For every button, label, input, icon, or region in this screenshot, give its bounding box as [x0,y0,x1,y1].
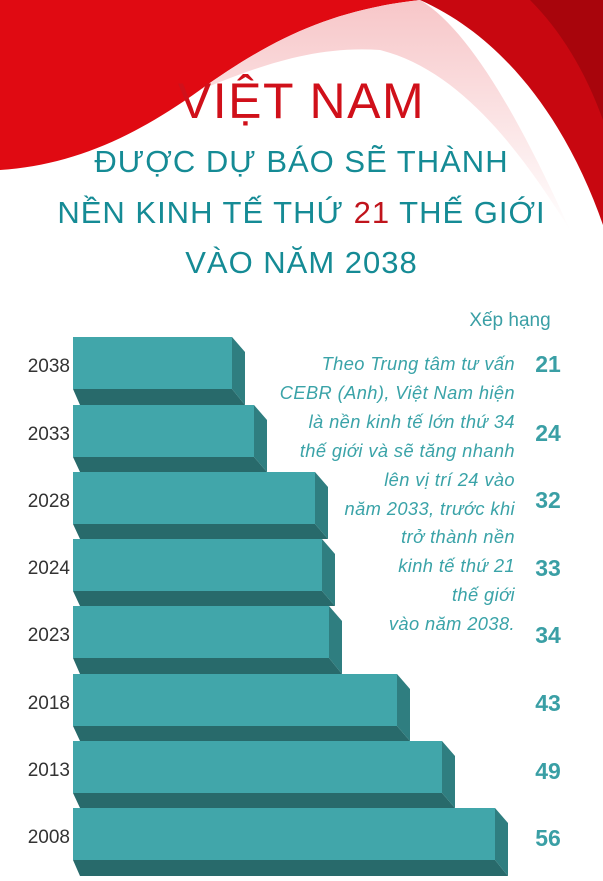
year labels: 2013 [28,760,70,781]
note text: CEBR (Anh), Việt Nam hiện [280,382,515,403]
year labels: 2033 [28,424,70,445]
subtitle: NỀN KINH TẾ THỨ 21 THẾ GIỚI [57,195,546,230]
note text: thế giới và sẽ tăng nhanh [300,440,515,461]
bar 2013 [73,741,455,808]
bar 2023 [73,606,342,674]
bar 2033 [73,405,267,472]
bar 2018 [73,674,410,741]
rank numbers: 56 [535,825,561,851]
year labels: 2008 [28,827,70,848]
subtitle [57,144,546,280]
rank header: Xếp hạng [469,310,551,331]
bar 2008 [73,808,508,876]
year labels: 2023 [28,625,70,646]
note text: thế giới [452,584,515,605]
year labels: 2028 [28,491,70,512]
rank numbers: 49 [535,758,561,784]
title: VIỆT NAM [178,73,425,129]
year labels [28,356,70,848]
note text: vào năm 2038. [389,613,515,634]
bar 2038 [73,337,245,405]
note text: năm 2033, trước khi [345,498,515,519]
rank numbers: 24 [535,420,561,446]
bar 2024 [73,539,335,606]
year labels: 2018 [28,693,70,714]
note text: lên vị trí 24 vào [384,469,515,490]
note text: kinh tế thứ 21 [398,555,515,576]
rank numbers: 21 [535,351,561,377]
year labels: 2024 [28,558,70,579]
note text [280,353,515,634]
rank numbers [535,351,561,851]
subtitle: VÀO NĂM 2038 [185,245,418,280]
note text: là nền kinh tế lớn thứ 34 [309,411,515,432]
rank numbers: 33 [535,555,561,581]
bar 2028 [73,472,328,539]
year labels: 2038 [28,356,70,377]
rank numbers: 43 [535,690,561,716]
note text: trở thành nền [401,526,515,547]
rank numbers: 34 [535,622,561,648]
note text: Theo Trung tâm tư vấn [322,353,515,374]
subtitle: ĐƯỢC DỰ BÁO SẼ THÀNH [94,144,509,179]
rank numbers: 32 [535,487,561,513]
